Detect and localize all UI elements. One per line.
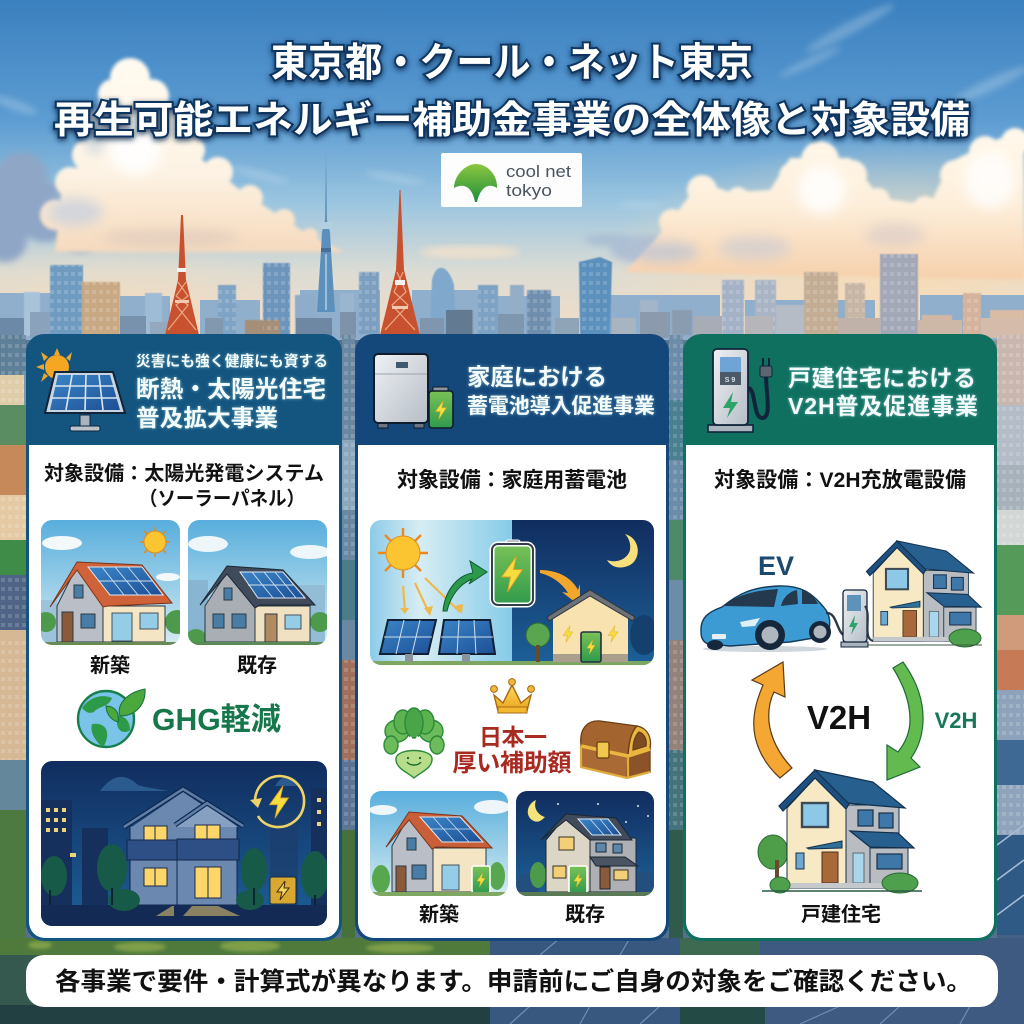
target equipment <box>44 461 324 510</box>
illustration: new house with battery <box>369 791 510 896</box>
label: detached house: 戸建住宅 <box>801 903 881 926</box>
labels: new and existing: 新築 <box>90 654 130 677</box>
arrow: green, car to home <box>887 662 923 780</box>
labels: new and existing: 既存 <box>565 903 605 926</box>
EV label: EV <box>758 551 794 581</box>
labels: new and existing <box>90 654 277 677</box>
left city strip <box>0 335 26 955</box>
target equipment: （ソーラーパネル） <box>139 488 305 510</box>
logo: cool net tokyo: tokyo <box>506 182 552 200</box>
left cumulus cloud <box>0 58 345 262</box>
icon: globe with leaf <box>78 689 145 747</box>
red slogan: 日本一 <box>479 724 547 750</box>
footer note <box>26 955 998 1007</box>
panel: solar housing <box>26 334 342 941</box>
labels: new and existing <box>419 903 605 926</box>
target equipment: 対象設備：家庭用蓄電池 <box>397 469 627 492</box>
title: 再生可能エネルギー補助金事業の全体像と対象設備 <box>54 100 970 142</box>
header text <box>136 352 328 431</box>
illustration: day charging and night use <box>370 520 658 665</box>
icon: ginkgo leaf <box>454 164 497 202</box>
header text: 断熱・太陽光住宅 <box>136 376 326 402</box>
target equipment: 対象設備：太陽光発電システム <box>44 461 324 485</box>
logo: cool net tokyo <box>441 153 582 207</box>
GHG reduction text: GHG軽減 <box>152 702 281 737</box>
middle city strip 1 <box>342 335 355 955</box>
header text: 普及拡大事業 <box>136 405 278 431</box>
right city strip <box>997 335 1024 1024</box>
footer note: 各事業で要件・計算式が異なります。申請前にご自身の対象をご確認ください。 <box>55 967 972 996</box>
header text <box>467 364 655 418</box>
labels: new and existing: 既存 <box>237 654 277 677</box>
panel: home battery <box>355 334 669 941</box>
illustration: existing house at night with battery <box>516 791 657 899</box>
bottom greenery <box>0 938 1024 1024</box>
header text: 災害にも強く健康にも資する <box>136 352 328 370</box>
red slogan <box>452 724 572 777</box>
illustration: electric car <box>701 586 846 652</box>
right cumulus clouds <box>584 128 1024 280</box>
icon: komatsuna mascot <box>384 708 444 778</box>
arrow: orange, home to car <box>752 662 792 778</box>
red slogan: 厚い補助額 <box>452 750 572 777</box>
target equipment: 対象設備：V2H充放電設備 <box>714 469 966 492</box>
header text <box>788 365 978 419</box>
icon: crown <box>491 679 534 713</box>
near low-rise row <box>0 310 1024 338</box>
header text: 蓄電池導入促進事業 <box>467 394 655 418</box>
skyline far buildings <box>0 290 1024 340</box>
icon: home battery unit <box>374 354 453 428</box>
illustration: new house with panels <box>36 520 189 645</box>
illustration: house with charger <box>866 541 982 647</box>
illustration: night house <box>41 761 329 926</box>
logo: cool net tokyo: cool net <box>506 163 571 181</box>
header text: 家庭における <box>467 364 607 390</box>
illustration: detached house <box>758 770 922 893</box>
icon: EV charger <box>708 349 772 432</box>
header text: V2H普及促進事業 <box>788 393 978 419</box>
title <box>54 41 970 142</box>
illustration: existing house with panels <box>185 520 330 651</box>
labels: new and existing: 新築 <box>419 903 459 926</box>
icon: EV charger: S 9 <box>725 377 735 384</box>
illustration: small charger <box>841 590 873 647</box>
wispy high clouds <box>0 0 1024 208</box>
panel: V2H <box>683 334 997 941</box>
header text: 戸建住宅における <box>788 365 976 391</box>
V2H side label: V2H <box>935 708 977 733</box>
tokyo towers <box>165 190 420 335</box>
icon: solar panel and sun <box>36 348 125 431</box>
V2H centre label: V2H <box>807 699 871 736</box>
title: 東京都・クール・ネット東京 <box>271 41 753 85</box>
skytree <box>317 152 335 312</box>
icon: treasure chest <box>581 721 650 778</box>
middle city strip 2 <box>669 335 683 955</box>
